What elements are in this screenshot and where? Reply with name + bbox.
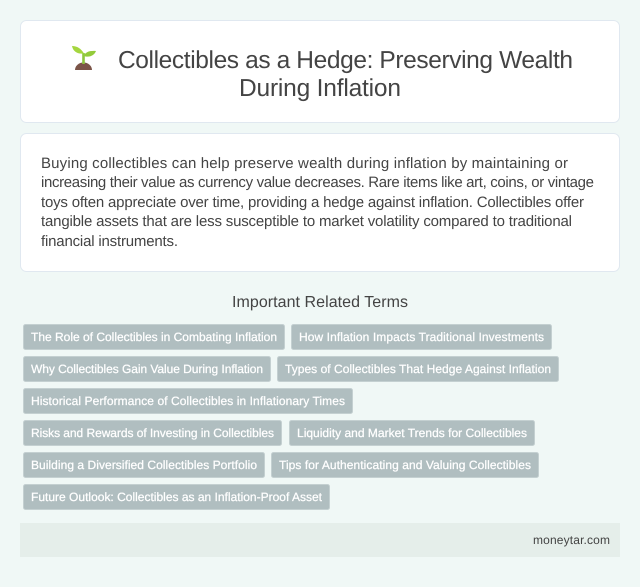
description text: financial instruments. bbox=[41, 233, 178, 250]
tags: related terms: Future Outlook: Collectibles as an Inflation-Proof Asset bbox=[31, 490, 323, 504]
tags: related terms: Building a Diversified Collectibles Portfolio bbox=[31, 458, 257, 472]
title: During Inflation bbox=[239, 75, 401, 102]
tags: related terms: Tips for Authenticating and Valuing Collectibles bbox=[279, 458, 531, 472]
description text: toys often appreciate over time, providing a hedge against inflation. Collectibles offer bbox=[41, 194, 584, 211]
description text: tangible assets that are less susceptible to market volatility compared to traditional bbox=[41, 213, 572, 230]
panel: description bbox=[20, 134, 620, 272]
panel: header card bbox=[20, 20, 620, 122]
tags: related terms: Types of Collectibles That Hedge Against Inflation bbox=[285, 362, 551, 376]
heading: related terms: Important Related Terms bbox=[232, 294, 408, 311]
footer bbox=[20, 523, 620, 557]
description text: Buying collectibles can help preserve wealth during inflation by maintaining or bbox=[41, 155, 568, 172]
description text bbox=[41, 155, 594, 250]
tags: related terms: Risks and Rewards of Investing in Collectibles bbox=[31, 426, 274, 440]
title bbox=[118, 47, 573, 102]
description text: increasing their value as currency value decreases. Rare items like art, coins, or vintage bbox=[41, 174, 594, 191]
title: Collectibles as a Hedge: Preserving Wealth bbox=[118, 47, 573, 74]
tags: related terms: Liquidity and Market Trends for Collectibles bbox=[297, 426, 527, 440]
footer: moneytar.com bbox=[533, 533, 610, 547]
tags: related terms: The Role of Collectibles in Combating Inflation bbox=[31, 330, 277, 344]
tags: related terms: Historical Performance of Collectibles in Inflationary Times bbox=[31, 394, 345, 408]
icon: seedling bbox=[72, 46, 96, 70]
tags: related terms: How Inflation Impacts Traditional Investments bbox=[299, 330, 544, 344]
tags: related terms bbox=[24, 324, 558, 510]
tags: related terms: Why Collectibles Gain Value During Inflation bbox=[31, 362, 263, 376]
